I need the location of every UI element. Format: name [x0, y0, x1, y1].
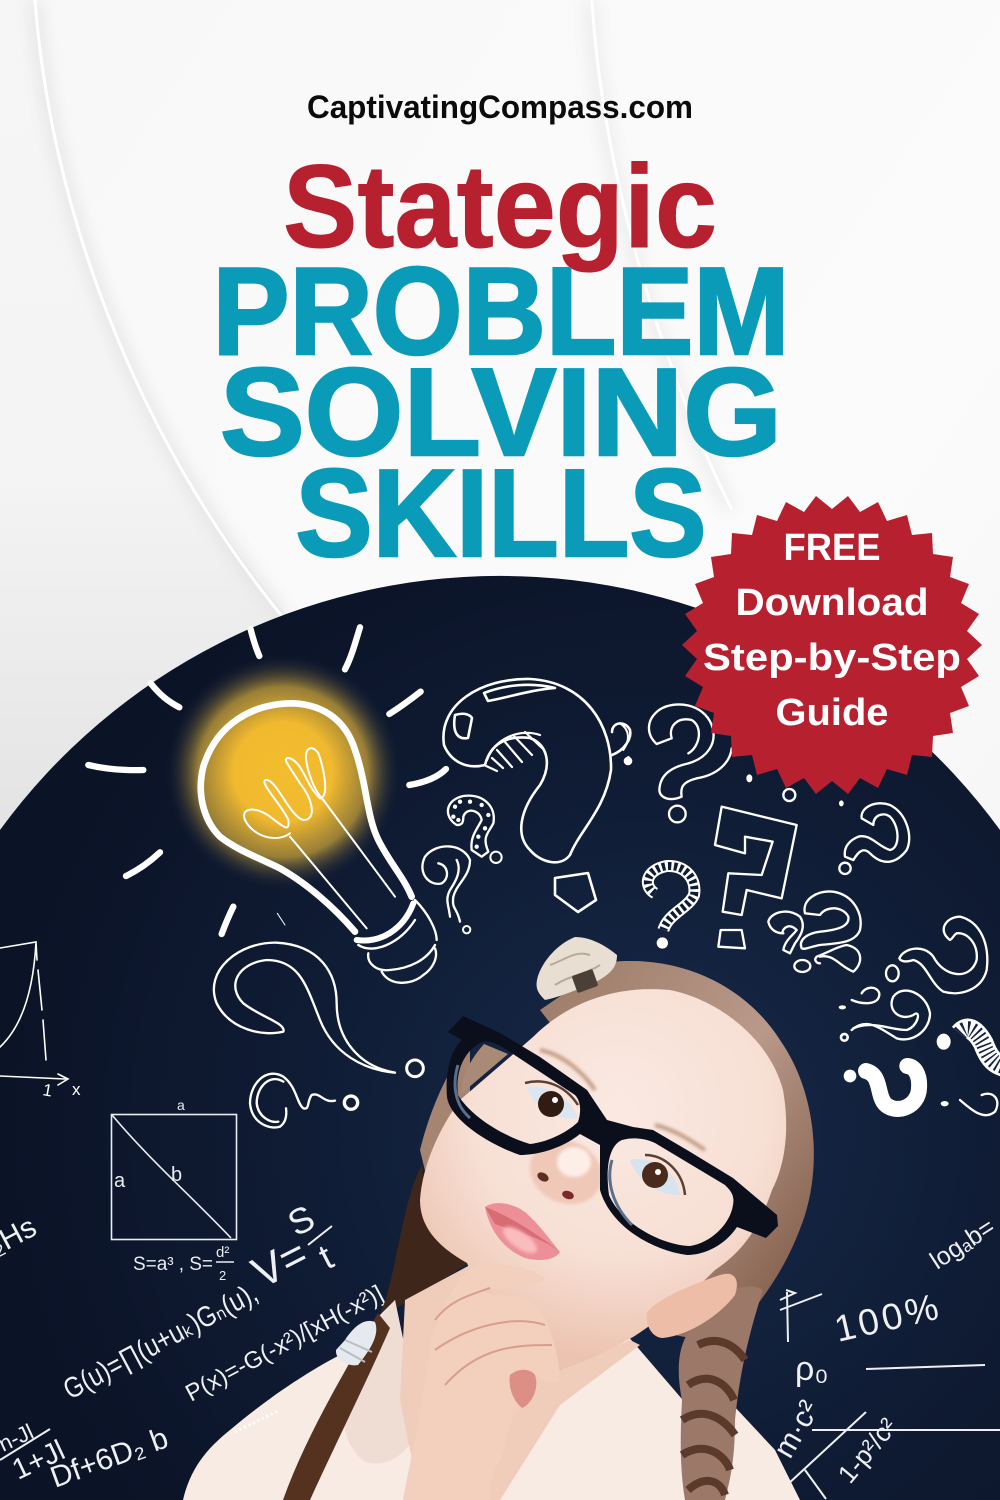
icon: swirl question mark	[422, 846, 470, 922]
formula: V = S/t: V=	[244, 1229, 316, 1298]
back hair	[380, 1040, 470, 1315]
icon: dot of curled question mark	[344, 1096, 358, 1109]
icon: tall outline question mark	[649, 704, 732, 799]
bulb rays	[88, 627, 446, 934]
lips	[485, 1203, 560, 1260]
math diagram: square with diagonal	[112, 1097, 236, 1283]
right braid	[679, 1286, 763, 1500]
icon: stacked question marks	[768, 891, 861, 972]
formula: P(x): P(x)=-G(-x²)/[xH(-x²)]	[181, 1280, 388, 1407]
formula: V = S/t	[244, 1197, 340, 1298]
math diagram: square with diagonal: b	[171, 1164, 182, 1186]
badge text: Step-by-Step	[703, 637, 961, 679]
icon: dot of swirl question mark	[463, 926, 470, 933]
badge text	[703, 527, 961, 734]
formula: V = S/t: S	[281, 1197, 321, 1244]
math diagram: square with diagonal: a	[177, 1097, 185, 1113]
root sign	[787, 1412, 1000, 1499]
formula: bottom left: Df+6D₂ b	[46, 1422, 173, 1495]
icon: bottom right question mark	[960, 1094, 997, 1115]
formula: fraction	[0, 1419, 70, 1486]
formula: 100 percent: 100%	[831, 1286, 942, 1350]
formula: G(u): G(u)=∏(u+uₖ)Gₙ(u),	[58, 1277, 263, 1406]
hand	[403, 1263, 559, 1500]
left math: axis chart: x	[72, 1080, 81, 1099]
math diagram: square with diagonal: 2	[219, 1268, 226, 1283]
formula: rho: ρ₀	[795, 1350, 828, 1388]
badge text: FREE	[784, 527, 880, 569]
site name: CaptivatingCompass.com	[307, 89, 693, 125]
badge: free download	[682, 496, 982, 794]
formula: log: logₐb=	[925, 1213, 1000, 1275]
eyebrows	[540, 1050, 705, 1150]
icon: block question mark	[715, 807, 797, 915]
icon: dotted question mark	[448, 796, 502, 863]
icon: dot of block question mark	[718, 930, 745, 948]
icon: dot of tall question mark	[669, 806, 686, 822]
hair	[540, 961, 814, 1340]
icon: striped right-edge question mark	[960, 1029, 1000, 1068]
formula: rho	[780, 1290, 828, 1388]
glasses	[447, 1016, 778, 1255]
nose	[519, 1128, 613, 1216]
decorative line with dot	[866, 1365, 985, 1369]
neck	[400, 1265, 640, 1500]
icon: small curled question mark	[250, 1074, 335, 1127]
math formulas on the left	[0, 1197, 388, 1495]
lens: eye right	[630, 1155, 685, 1195]
math formulas on the right: 1-p²/c²	[832, 1412, 903, 1489]
icon: small dots	[626, 756, 951, 1106]
icon: dot of large question mark	[407, 1060, 423, 1077]
badge text: Download	[736, 582, 928, 624]
math diagram: square with diagonal: d²	[216, 1244, 229, 1261]
lens: eye left	[525, 1081, 578, 1119]
icon: small floating question mark	[852, 988, 879, 1003]
math diagram: square with diagonal: a	[114, 1170, 126, 1192]
icon: dot of top right question mark	[839, 863, 851, 874]
left math: axis chart	[0, 942, 81, 1101]
formula: V = S/t: t	[312, 1236, 340, 1277]
title line: SKILLS: SKILLS	[296, 445, 706, 583]
title line: Stategic: Stategic	[283, 141, 717, 273]
starburst shape	[682, 496, 982, 794]
icon: big 3D question mark	[443, 679, 631, 912]
icon: glowing light bulb	[88, 627, 446, 983]
formula: m c squared: m·c²	[767, 1395, 826, 1464]
doodles: question marks around the bulb	[214, 796, 502, 1127]
hair flower clip	[537, 937, 617, 1000]
badge text: Guide	[776, 692, 888, 734]
icon: dot of far right question mark	[886, 965, 899, 981]
face	[420, 989, 786, 1370]
girl with glasses	[183, 937, 814, 1500]
title line: PROBLEM: PROBLEM	[212, 243, 790, 381]
icon: dot of stacked question marks	[794, 960, 810, 972]
icon: large outline question mark	[214, 943, 395, 1073]
left braid	[283, 1313, 390, 1500]
formula: fraction: 1+Jl	[7, 1435, 70, 1486]
doodles: question marks on the right	[620, 704, 1000, 1115]
shirt	[183, 1300, 800, 1500]
icon: striped question mark	[648, 866, 694, 949]
icon: top right question mark	[845, 803, 909, 862]
left math: axis chart: 1	[41, 1080, 54, 1101]
ear	[647, 1274, 737, 1338]
title line: SOLVING: SOLVING	[220, 344, 782, 482]
icon: solid white question mark	[844, 1066, 919, 1109]
icon: lower swirl question mark	[852, 991, 930, 1039]
math diagram: square with diagonal: S=a³ , S=	[133, 1254, 213, 1275]
title	[212, 141, 790, 583]
math formulas on the right	[767, 1213, 1000, 1499]
icon: far right outline question mark	[899, 917, 987, 993]
hair tie	[336, 1321, 376, 1365]
chalkboard circle	[0, 576, 1000, 1500]
